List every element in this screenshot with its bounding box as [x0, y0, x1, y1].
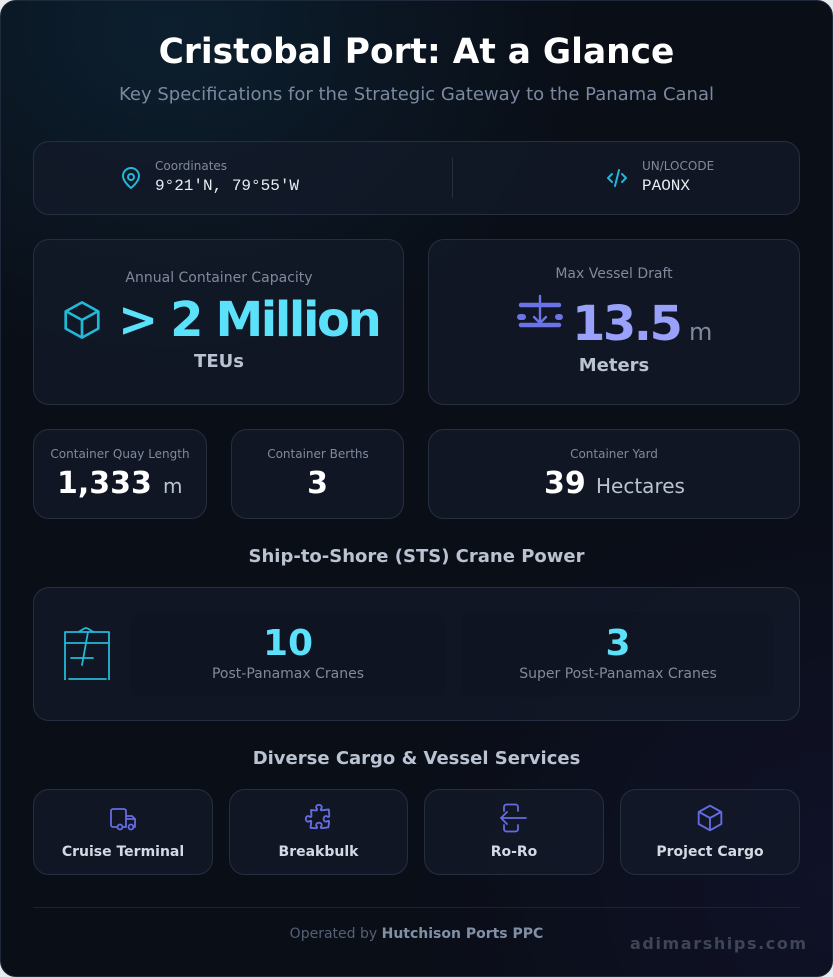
- label: capacity: Annual Container Capacity: [125, 270, 313, 286]
- icon: draft gauge: [517, 294, 563, 328]
- unit: m: m: [689, 318, 712, 346]
- icon: container box: [64, 301, 100, 339]
- panel: cruise terminal: [33, 789, 213, 875]
- unit: hectares: Hectares: [596, 474, 685, 498]
- watermark: adimarships.com: [630, 934, 808, 953]
- panel: container yard: [428, 429, 800, 519]
- value: berths: 3: [307, 466, 328, 501]
- label: berths: Container Berths: [267, 447, 369, 461]
- panel: ro-ro: [424, 789, 604, 875]
- value: capacity: > 2 Million: [118, 292, 379, 348]
- panel: container berths: [231, 429, 404, 519]
- panel: project cargo: [620, 789, 800, 875]
- unit: Meters: Meters: [579, 355, 649, 376]
- icon: truck: [110, 808, 136, 830]
- value: yard: 39: [544, 466, 586, 501]
- label: project cargo: Project Cargo: [656, 844, 764, 860]
- panel: location identifiers: [33, 141, 800, 215]
- label: ro-ro: Ro-Ro: [491, 844, 537, 860]
- value: post-panamax: 10: [263, 623, 313, 664]
- footer: operator credit: Operated by Hutchison Ports PPC: [290, 926, 543, 942]
- icon: puzzle piece: [304, 804, 330, 830]
- icon: cargo box: [698, 804, 722, 832]
- label: quay length: Container Quay Length: [50, 447, 190, 461]
- panel: container quay length: [33, 429, 207, 519]
- label: coordinates: Coordinates: [155, 159, 227, 173]
- label: UN/LOCODE: UN/LOCODE: [642, 159, 714, 173]
- label: breakbulk: Breakbulk: [279, 844, 358, 860]
- label: yard: Container Yard: [570, 447, 658, 461]
- panel: crane power: [33, 587, 800, 721]
- panel: max vessel draft: [428, 239, 800, 405]
- value: UN/LOCODE: PAONX: [642, 177, 690, 195]
- subtitle: Key Specifications for the Strategic Gateway to the Panama Canal: [119, 84, 714, 105]
- icon: ro-ro ramp: [500, 804, 527, 832]
- heading: cargo services: Diverse Cargo & Vessel Services: [253, 748, 580, 769]
- unit: TEUs: TEUs: [194, 351, 244, 372]
- icon: STS crane: [64, 627, 110, 680]
- icon: code: [607, 169, 627, 187]
- value: super post-panamax: 3: [605, 623, 631, 664]
- heading: crane power: Ship-to-Shore (STS) Crane Power: [249, 546, 584, 567]
- stat box: super post-panamax: [461, 612, 773, 697]
- value: draft: 13.5: [572, 296, 680, 352]
- label: cruise terminal: Cruise Terminal: [62, 844, 184, 860]
- stat box: post-panamax: [131, 612, 445, 697]
- label: post-panamax: Post-Panamax Cranes: [212, 666, 364, 682]
- panel: breakbulk: [229, 789, 408, 875]
- value: quay length: 1,333: [57, 466, 152, 501]
- label: draft: Max Vessel Draft: [555, 266, 673, 282]
- panel: annual container capacity: [33, 239, 404, 405]
- title: Cristobal Port: At a Glance: [159, 32, 674, 72]
- value: coordinates: 9°21'N, 79°55'W: [155, 177, 299, 195]
- footer divider: [33, 907, 800, 908]
- unit: m: m: [163, 474, 182, 498]
- label: super post-panamax: Super Post-Panamax Cranes: [519, 666, 717, 682]
- divider: [452, 158, 453, 198]
- icon: map pin: [122, 167, 140, 189]
